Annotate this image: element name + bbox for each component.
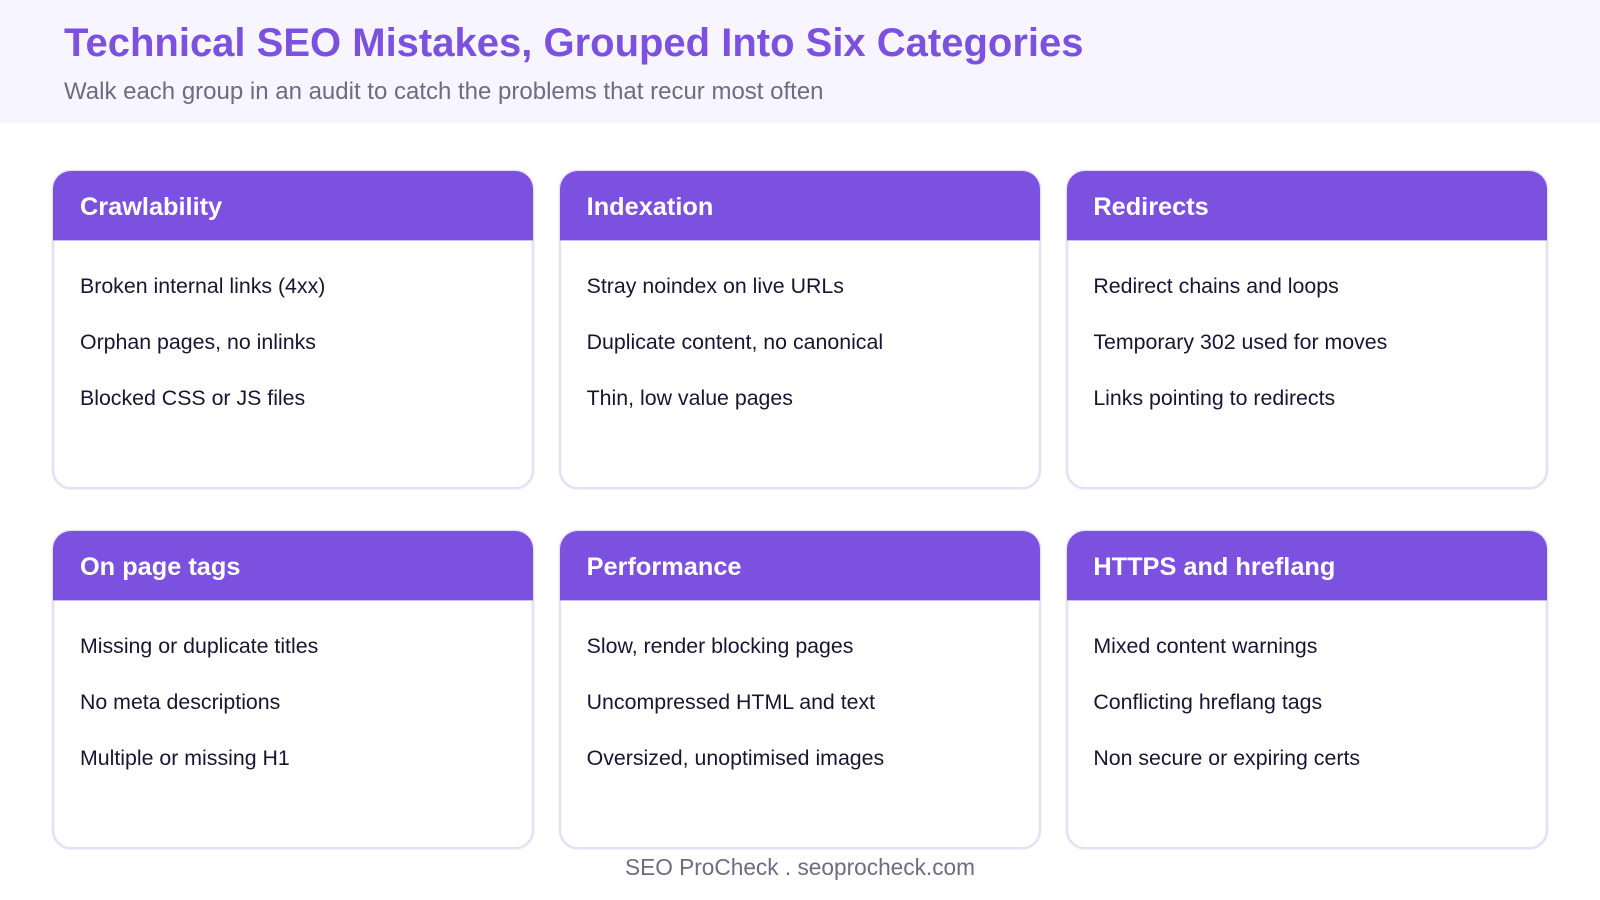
footer: SEO ProCheck . seoprocheck.com xyxy=(625,854,975,880)
item: Mixed content warnings xyxy=(1093,634,1317,658)
title: Technical SEO Mistakes, Grouped Into Six Categories xyxy=(64,21,1084,65)
item: Uncompressed HTML and text xyxy=(587,690,875,714)
item: Slow, render blocking pages xyxy=(587,634,853,658)
panel: Performance xyxy=(558,530,1042,850)
subtitle: Walk each group in an audit to catch the problems that recur most often xyxy=(64,78,824,105)
heading: On page tags: On page tags xyxy=(80,553,240,581)
panel: Redirects xyxy=(1066,170,1548,490)
item: Non secure or expiring certs xyxy=(1093,746,1360,770)
item: Orphan pages, no inlinks xyxy=(80,330,316,354)
item: Redirect chains and loops xyxy=(1093,274,1339,298)
item: Duplicate content, no canonical xyxy=(587,330,883,354)
item: Multiple or missing H1 xyxy=(80,746,290,770)
heading: Indexation: Indexation xyxy=(587,193,713,221)
panel: Crawlability xyxy=(52,170,534,490)
header band xyxy=(0,0,1600,123)
item: Thin, low value pages xyxy=(587,386,793,410)
heading: Performance: Performance xyxy=(587,553,742,581)
item: Temporary 302 used for moves xyxy=(1093,330,1387,354)
item: Broken internal links (4xx) xyxy=(80,274,325,298)
item: No meta descriptions xyxy=(80,690,280,714)
heading: Redirects: Redirects xyxy=(1093,193,1209,221)
item: Blocked CSS or JS files xyxy=(80,386,305,410)
heading: HTTPS and hreflang: HTTPS and hreflang xyxy=(1093,553,1335,581)
item: Conflicting hreflang tags xyxy=(1093,690,1322,714)
item: Oversized, unoptimised images xyxy=(587,746,884,770)
item: Links pointing to redirects xyxy=(1093,386,1335,410)
panel: On page tags xyxy=(52,530,534,850)
panel: Indexation xyxy=(558,170,1042,490)
item: Missing or duplicate titles xyxy=(80,634,318,658)
heading: Crawlability: Crawlability xyxy=(80,193,222,221)
item: Stray noindex on live URLs xyxy=(587,274,844,298)
panel: HTTPS and hreflang xyxy=(1066,530,1548,850)
